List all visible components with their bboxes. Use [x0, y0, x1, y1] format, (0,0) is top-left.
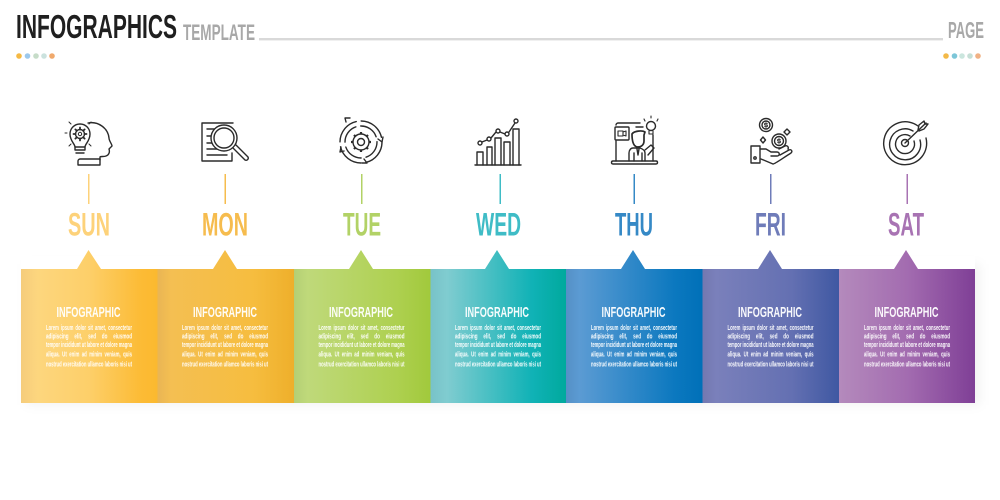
panel text: thu: aliqua. Ut enim ad minim veniam, quis [591, 352, 677, 358]
panel text: fri: Lorem ipsum dolor sit amet, consectetur [728, 325, 814, 332]
day: wed: WED [476, 206, 521, 242]
day: fri: FRI [755, 206, 786, 242]
panel text: wed: Lorem ipsum dolor sit amet, consectetur [455, 325, 541, 332]
panel heading: sat: INFOGRAPHIC [874, 304, 939, 321]
panel heading: thu: INFOGRAPHIC [602, 304, 666, 321]
panel text: tue [318, 325, 405, 368]
panel text: sat: aliqua. Ut enim ad minim veniam, quis [864, 352, 950, 358]
icon: hand with coins [751, 118, 792, 164]
icon: gear with cycle arrows [340, 118, 383, 163]
icon: laptop with presenter [612, 116, 658, 164]
panel text: tue: tempor incididunt ut labore et dolore magna [318, 342, 405, 349]
tick: mon [224, 174, 226, 204]
panel text: wed: aliqua. Ut enim ad minim veniam, quis [455, 352, 541, 358]
panel heading: fri: INFOGRAPHIC [738, 304, 802, 321]
panel text: fri: aliqua. Ut enim ad minim veniam, quis [728, 352, 814, 358]
day: tue: TUE [343, 206, 381, 242]
panel text: sun: Lorem ipsum dolor sit amet, consectetur [46, 325, 132, 332]
panel text: fri: adipiscing elit, sed do eiusmod [728, 334, 814, 340]
panel text: fri [728, 325, 814, 368]
tick: thu [634, 174, 635, 204]
day: sun: SUN [68, 206, 110, 242]
panel text: mon: Lorem ipsum dolor sit amet, consectetur [182, 325, 268, 332]
panel text: mon: nostrud exercitation ullamco laboris nisi ut [182, 362, 268, 368]
white strip above panels [21, 256, 975, 270]
panel text: mon: tempor incididunt ut labore et dolore magna [182, 342, 268, 349]
header rule [259, 38, 943, 40]
panel text: tue: Lorem ipsum dolor sit amet, consectetur [318, 325, 405, 332]
panel heading: mon: INFOGRAPHIC [193, 304, 257, 321]
icon: document with magnifier [202, 123, 248, 161]
panel text: thu: Lorem ipsum dolor sit amet, consectetur [591, 325, 677, 332]
tick: fri [770, 174, 772, 204]
tick: tue [361, 174, 362, 204]
panel: sat [839, 250, 975, 403]
panel: mon [158, 250, 294, 403]
panel heading: sun: INFOGRAPHIC [56, 304, 121, 321]
panel: tue [294, 250, 430, 403]
panel text: wed: adipiscing elit, sed do eiusmod [455, 334, 541, 340]
panel text: thu [591, 325, 677, 368]
icon: bar chart with trend line [475, 119, 521, 165]
tick: sat [906, 174, 908, 204]
panel text: tue: adipiscing elit, sed do eiusmod [318, 334, 404, 340]
panel text: wed: tempor incididunt ut labore et dolore magna [455, 342, 541, 349]
panel text: thu: nostrud exercitation ullamco laboris nisi ut [591, 362, 677, 368]
panel text: mon: aliqua. Ut enim ad minim veniam, quis [182, 352, 268, 358]
right dots [943, 53, 981, 59]
subtitle: TEMPLATE [183, 20, 255, 45]
panel text: mon [182, 325, 268, 368]
panel text: mon: adipiscing elit, sed do eiusmod [182, 334, 268, 340]
panel text: wed: nostrud exercitation ullamco laboris nisi ut [455, 362, 541, 368]
panel text: thu: tempor incididunt ut labore et dolore magna [591, 342, 677, 349]
panel text: sun [46, 325, 132, 368]
panel: wed [430, 250, 566, 403]
panel text: fri: tempor incididunt ut labore et dolore magna [728, 342, 814, 349]
panel text: sat: adipiscing elit, sed do eiusmod [864, 334, 950, 340]
icon: target with arrow [884, 121, 928, 165]
tick: wed [500, 174, 501, 204]
day: thu: THU [615, 206, 653, 242]
day: mon: MON [202, 206, 248, 242]
panel text: wed [455, 325, 541, 368]
panel: sun [21, 250, 158, 403]
panel: fri [702, 250, 839, 403]
day: sat: SAT [888, 206, 924, 242]
panel heading: wed: INFOGRAPHIC [465, 304, 529, 321]
left dots [16, 53, 55, 59]
tick: sun [88, 174, 90, 204]
icon: head with light bulb [65, 122, 112, 165]
panel text: fri: nostrud exercitation ullamco laboris nisi ut [728, 362, 814, 368]
panel text: tue: aliqua. Ut enim ad minim veniam, quis [318, 352, 405, 358]
panel text: thu: adipiscing elit, sed do eiusmod [591, 334, 677, 340]
soft shadow behind panels [26, 264, 980, 405]
panel text: sun: adipiscing elit, sed do eiusmod [46, 334, 132, 340]
panel text: sun: aliqua. Ut enim ad minim veniam, quis [46, 352, 132, 358]
panel text: sun: nostrud exercitation ullamco laboris nisi ut [46, 362, 132, 368]
panel text: sun: tempor incididunt ut labore et dolore magna [46, 342, 132, 349]
panel heading: tue: INFOGRAPHIC [329, 304, 393, 321]
panel: thu [566, 250, 702, 403]
title: INFOGRAPHICS [16, 8, 177, 45]
panel text: tue: nostrud exercitation ullamco laboris nisi ut [318, 362, 405, 368]
panel text: sat [864, 325, 950, 368]
